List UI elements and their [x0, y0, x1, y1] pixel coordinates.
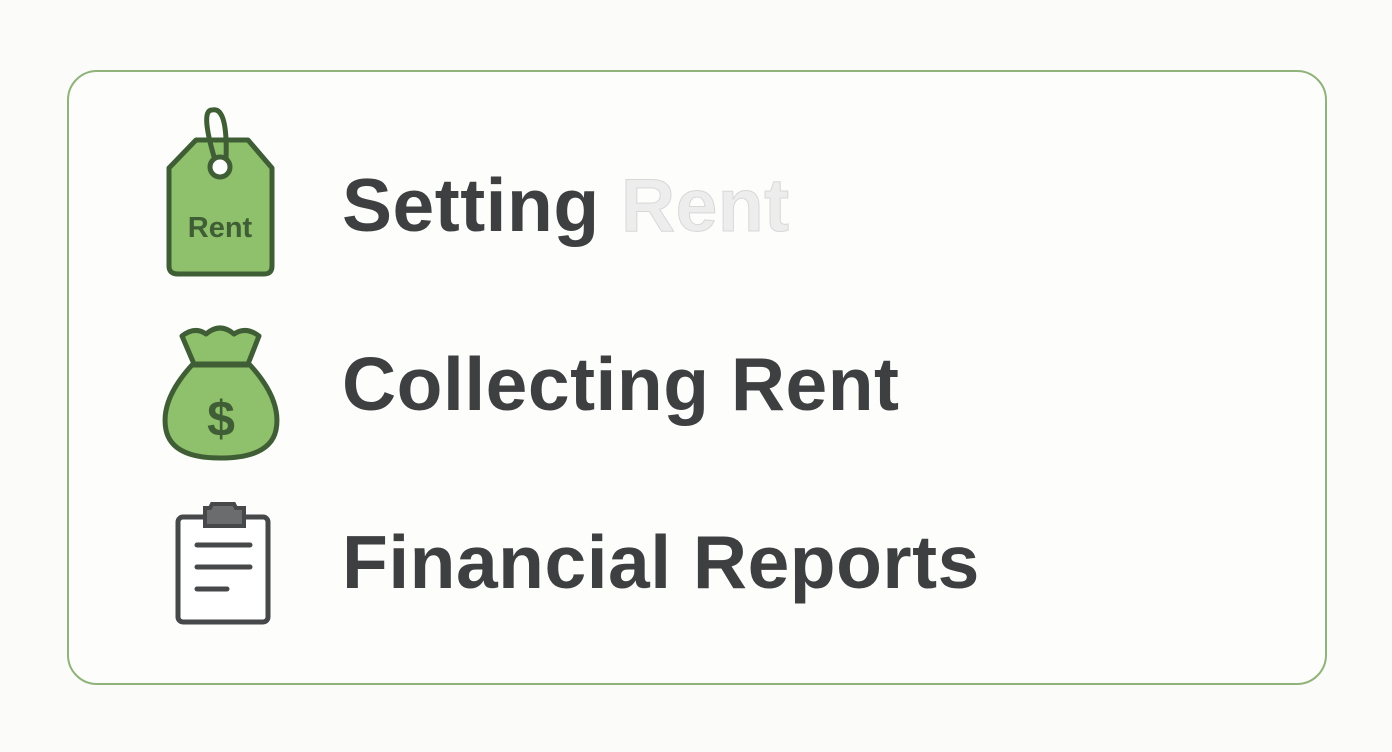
icon: rent tag	[166, 107, 274, 276]
icon: money bag: $	[207, 391, 235, 447]
icon: clipboard	[176, 502, 270, 624]
heading: collecting rent: Collecting Rent	[342, 342, 900, 426]
icon: rent tag: Rent	[188, 212, 253, 244]
icon: money bag	[162, 325, 280, 460]
panel: card	[67, 70, 1327, 685]
heading: financial reports: Financial Reports	[342, 520, 980, 604]
heading: setting rent: Setting Rent	[342, 163, 790, 247]
